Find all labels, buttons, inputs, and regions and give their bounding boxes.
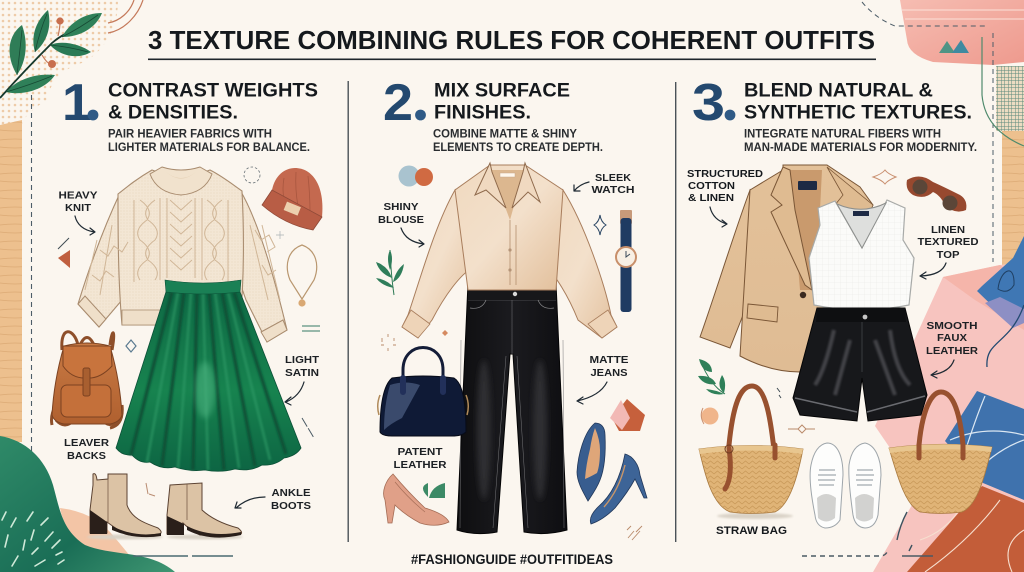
decoration: bottom-right collage bbox=[873, 236, 1024, 572]
label: ankle boots: ANKLE bbox=[272, 487, 310, 499]
icon: pink pump bbox=[384, 474, 449, 525]
column dividers bbox=[348, 81, 676, 542]
label: structured cotton and linen: & LINEN bbox=[688, 192, 734, 204]
label: shiny blouse: SHINY bbox=[384, 201, 418, 213]
decoration: top-right pink shape, mesh and wood bbox=[862, 0, 1024, 290]
label: linen textured top bbox=[918, 224, 979, 279]
label: heavy knit: KNIT bbox=[65, 202, 92, 214]
label: matte jeans: JEANS bbox=[590, 367, 628, 379]
decoration: top-left dotted corner and wood strip bbox=[0, 0, 143, 462]
icon: brown sunglasses bbox=[873, 170, 966, 212]
panel: rule 3 heading: INTEGRATE NATURAL FIBERS WITH bbox=[744, 128, 941, 140]
title: 3 TEXTURE COMBINING RULES FOR COHERENT OUTFITS bbox=[148, 27, 875, 55]
label: light satin: LIGHT bbox=[285, 354, 320, 366]
label: straw bag: STRAW BAG bbox=[716, 525, 787, 537]
cable pattern bbox=[85, 198, 280, 300]
icon: brown leather backpack bbox=[52, 332, 136, 428]
panel: rule 2 heading: COMBINE MATTE & SHINY bbox=[433, 128, 577, 140]
label: smooth faux leather: LEATHER bbox=[926, 345, 978, 357]
label: patent leather: LEATHER bbox=[394, 459, 447, 471]
label: light satin: SATIN bbox=[285, 367, 319, 379]
icon: white sneakers bbox=[788, 425, 881, 528]
panel: rule 1 heading: 1 bbox=[62, 74, 92, 132]
boot 2 bbox=[167, 483, 242, 535]
label: heavy knit bbox=[58, 190, 98, 235]
label: shiny blouse bbox=[378, 201, 424, 247]
label: structured cotton and linen: STRUCTURED bbox=[687, 168, 763, 180]
label: ankle boots: BOOTS bbox=[271, 500, 311, 512]
label: smooth faux leather: SMOOTH bbox=[926, 320, 978, 332]
icon: rust beanie bbox=[244, 167, 322, 239]
panel: rule 1 heading: CONTRAST WEIGHTS bbox=[108, 80, 318, 102]
icon: leaf sprig bbox=[0, 10, 102, 98]
panel: rule 2 heading: 2 bbox=[383, 74, 413, 132]
hashtags: #FASHIONGUIDE #OUTFITIDEAS bbox=[411, 551, 613, 567]
icon: green sprig bbox=[376, 250, 404, 295]
illustration: green satin pleated skirt bbox=[116, 280, 301, 471]
label: sleek watch bbox=[574, 172, 634, 196]
label: smooth faux leather bbox=[926, 320, 978, 378]
right sleeve bbox=[225, 190, 287, 342]
label: matte jeans: MATTE bbox=[590, 354, 628, 366]
sweater body bbox=[118, 170, 243, 325]
label: sleek watch: SLEEK bbox=[595, 172, 631, 184]
accents: rule 3 dashes bbox=[802, 550, 933, 556]
panel: rule 1 heading: & DENSITIES. bbox=[108, 102, 238, 124]
panel: rule 3 heading bbox=[692, 74, 977, 154]
label: leaver backs: BACKS bbox=[67, 450, 106, 462]
icon: necklace bbox=[287, 245, 317, 307]
illustration: black jeans bbox=[457, 283, 567, 534]
sleeves bbox=[402, 190, 472, 338]
illustration: white linen top bbox=[809, 200, 914, 310]
icon: straw bag right bbox=[889, 392, 992, 514]
icon: overlapping circles bbox=[398, 166, 433, 186]
panel: rule 3 heading: 3 bbox=[692, 74, 725, 132]
label: smooth faux leather: FAUX bbox=[937, 332, 967, 344]
label: heavy knit: HEAVY bbox=[58, 190, 98, 202]
label: linen textured top: TOP bbox=[936, 249, 960, 261]
label: linen textured top: LINEN bbox=[931, 224, 965, 236]
blazer sleeve bbox=[700, 190, 770, 348]
panel: rule 1 heading bbox=[62, 74, 318, 154]
panel: rule 1 heading: PAIR HEAVIER FABRICS WITH bbox=[108, 128, 272, 140]
illustration: tan blazer bbox=[700, 165, 873, 372]
panel: rule 2 heading bbox=[383, 74, 603, 154]
icon: straw bag left bbox=[699, 386, 803, 519]
icon: blue pumps bbox=[577, 399, 647, 540]
panel: rule 3 heading: SYNTHETIC TEXTURES. bbox=[744, 102, 972, 124]
icon: small triangle accent bbox=[58, 238, 70, 268]
panel: rule 1 heading: LIGHTER MATERIALS FOR BALANCE. bbox=[108, 142, 310, 154]
label: ankle boots bbox=[235, 487, 311, 512]
label: linen textured top: TEXTURED bbox=[918, 236, 979, 248]
illustration: cream cable-knit sweater bbox=[78, 167, 287, 342]
icon: small green sprig bbox=[698, 359, 781, 424]
label: patent leather bbox=[394, 446, 447, 471]
label: light satin bbox=[285, 354, 320, 405]
label: structured cotton and linen bbox=[687, 168, 763, 227]
label: leaver backs bbox=[64, 437, 109, 462]
accents: rule 1 strokes bbox=[133, 326, 320, 556]
label: sleek watch: WATCH bbox=[592, 184, 634, 196]
panel: rule 2 heading: ELEMENTS TO CREATE DEPTH. bbox=[433, 142, 603, 154]
panel: rule 3 heading: MAN-MADE MATERIALS FOR MODERNITY. bbox=[744, 142, 977, 154]
cuffs and hem bbox=[78, 296, 106, 327]
icon: beige ankle boots bbox=[87, 474, 243, 540]
body bbox=[455, 165, 563, 290]
illustration: black faux leather shorts bbox=[793, 308, 927, 421]
left sleeve bbox=[78, 193, 140, 327]
label: matte jeans bbox=[577, 354, 628, 404]
panel: rule 2 heading: FINISHES. bbox=[434, 102, 531, 124]
decoration: bottom-left green shape bbox=[0, 436, 175, 572]
boot 1 bbox=[90, 474, 161, 536]
collar bbox=[150, 167, 212, 195]
illustration: satin blouse bbox=[402, 163, 617, 338]
icon: navy patent handbag bbox=[378, 330, 468, 436]
panel: rule 3 heading: BLEND NATURAL & bbox=[744, 80, 933, 102]
icon: navy leather watch bbox=[594, 210, 636, 312]
label: shiny blouse: BLOUSE bbox=[378, 214, 424, 226]
panel: rule 2 heading: MIX SURFACE bbox=[434, 80, 570, 102]
label: structured cotton and linen: COTTON bbox=[688, 180, 735, 192]
label: patent leather: PATENT bbox=[398, 446, 443, 458]
label: leaver backs: LEAVER bbox=[64, 437, 109, 449]
blazer body bbox=[740, 165, 873, 372]
